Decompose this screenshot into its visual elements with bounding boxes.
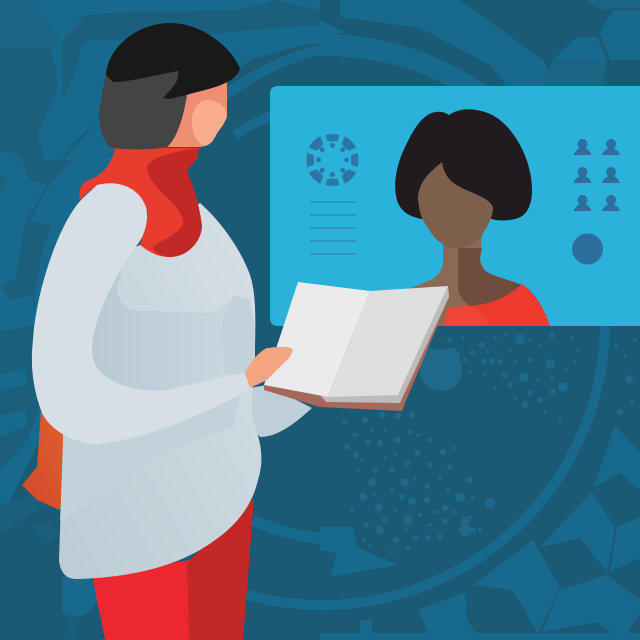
coat <box>59 203 261 579</box>
coat shade <box>60 395 240 520</box>
background: bottom diamonds <box>320 425 640 640</box>
icon: ring logo <box>306 134 358 186</box>
book <box>264 282 450 411</box>
front arm <box>32 183 250 444</box>
woman on screen <box>395 109 550 326</box>
background: rings <box>39 39 605 605</box>
screen panel <box>270 86 640 326</box>
face <box>165 80 227 147</box>
trousers <box>92 498 254 640</box>
background: dots <box>342 332 637 554</box>
text lines <box>310 202 356 254</box>
back arm <box>240 385 312 437</box>
background: top band <box>340 0 556 86</box>
icon: record button <box>572 234 603 264</box>
background: left light area <box>0 0 320 520</box>
background: bottom left shapes <box>53 573 97 617</box>
hair <box>99 60 187 149</box>
cape <box>22 410 70 510</box>
scarf <box>79 148 202 257</box>
icon: participant grid <box>574 139 620 211</box>
person <box>22 23 312 640</box>
torso shade <box>92 267 255 390</box>
hand <box>245 347 293 388</box>
